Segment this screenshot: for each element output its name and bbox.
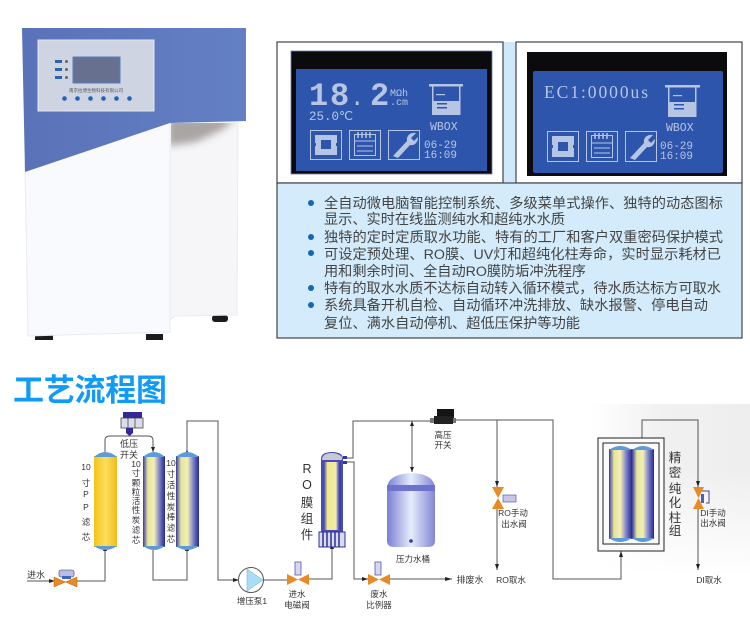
granular carbon label: 颗 (132, 478, 141, 488)
carbon rod label: 寸 (167, 469, 176, 479)
carbon rod label (166, 458, 176, 544)
blue top housing (22, 28, 246, 172)
reading: EC1:0000us (544, 82, 648, 102)
cabinet feet (35, 315, 228, 340)
notepad icon (350, 130, 380, 160)
wrench icon (626, 132, 656, 162)
panel: left LCD display: 2 (370, 78, 389, 115)
RO membrane label: R (302, 462, 312, 476)
high pressure switch label (434, 430, 452, 450)
polishing column label: 化 (669, 496, 682, 510)
carbon rod label: 滤 (167, 523, 176, 533)
inlet valve (54, 570, 77, 587)
date and time: 06-29 (424, 140, 457, 152)
high pressure switch label: 开关 (434, 440, 452, 450)
DI manual valve label (700, 508, 726, 528)
feature text: 特有的取水水质不达标自动转入循环模式，待水质达标方可取水 (324, 281, 721, 297)
RO membrane label: 膜 (301, 496, 313, 510)
granular carbon label: 芯 (132, 535, 141, 545)
RO membrane module (319, 452, 347, 547)
granular carbon label (131, 459, 141, 545)
low pressure switch label: 开关 (120, 449, 138, 460)
granular carbon label: 滤 (132, 525, 141, 535)
low pressure switch label: 低压 (120, 438, 138, 449)
arrowheads (49, 421, 700, 583)
carbon rod label: 炭 (167, 502, 176, 512)
polishing column label: 精 (669, 451, 681, 465)
PP filter label: P (83, 489, 89, 499)
PP filter tank (94, 452, 117, 550)
feature text: 复位、满水自动停机、超低压保护等功能 (324, 315, 580, 332)
feature text: 独特的定时定质取水功能、特有的工厂和客户双重密码保护模式 (324, 229, 723, 246)
concentrate ratio valve (368, 562, 390, 585)
concentrate ratio label: 比例器 (366, 600, 392, 610)
inlet label: 进水 (27, 569, 45, 580)
temperature: 25.0℃ (309, 110, 353, 124)
panel company name: 南京拉博生物科技有限公司 (69, 87, 123, 94)
RO membrane label (301, 462, 313, 542)
recess shadow (168, 118, 236, 146)
pressure tank label: 压力水桶 (396, 554, 430, 564)
inlet solenoid label: 进水 (288, 589, 306, 599)
inlet solenoid label (284, 589, 310, 610)
pipes (27, 420, 698, 581)
frame (277, 42, 503, 183)
cabinet white body (25, 120, 170, 336)
inlet solenoid label: 电磁阀 (284, 600, 310, 610)
RO membrane label: 件 (301, 528, 313, 542)
carbon rod label: 性 (167, 491, 176, 501)
screen (533, 71, 723, 173)
panel: left LCD display: 16:09 (424, 150, 457, 162)
heading: process flow diagram: 工艺流程图 (13, 365, 167, 410)
polishing column right (632, 446, 654, 542)
polishing column label (669, 451, 682, 538)
PP filter label: 滤 (82, 517, 91, 527)
wrench icon (388, 130, 420, 160)
reading: 1 (309, 78, 328, 115)
carbon rod label: 活 (167, 480, 176, 490)
WBOX label: WBOX (430, 121, 458, 134)
high pressure switch (430, 409, 456, 424)
carbon rod label: 10 (166, 458, 176, 468)
bezel (291, 51, 492, 174)
carbon rod label: 棒 (167, 512, 176, 522)
panel: right LCD display (516, 42, 742, 183)
date and time: 06-29 (660, 141, 693, 153)
panel: LCD screens area background (503, 42, 516, 184)
booster pump label: 增压泵1 (237, 596, 267, 606)
RO manual valve (492, 487, 516, 509)
high pressure switch label: 高压 (434, 430, 452, 440)
feature text: 全自动微电脑智能控制系统、多级菜单式操作、独特的动态图标 (324, 195, 723, 212)
panel: left LCD display: 8 (330, 78, 349, 115)
granular carbon label: 10 (131, 459, 141, 469)
tank icon (665, 85, 700, 117)
DI manual valve label: DI手动 (700, 508, 726, 518)
panel: right LCD display: 16:09 (660, 151, 693, 163)
RO manual valve label (498, 508, 528, 529)
panel screen (73, 57, 120, 83)
concentrate ratio label: 废水 (370, 589, 388, 599)
RO water label: RO取水 (496, 575, 526, 585)
polishing column label: 柱 (669, 510, 681, 525)
PP filter label: 寸 (82, 478, 91, 488)
notepad icon (586, 132, 618, 162)
panel indicators (55, 60, 68, 79)
granular carbon label: 活 (132, 496, 141, 506)
bezel (527, 52, 727, 176)
inlet solenoid valve (287, 562, 309, 585)
polishing column label: 纯 (669, 482, 682, 496)
screen (296, 69, 487, 171)
PP filter label: 芯 (82, 532, 91, 542)
granular carbon label: 性 (132, 505, 141, 515)
panel: left LCD display (277, 42, 503, 183)
control panel (38, 40, 154, 111)
cabinet right side (170, 122, 238, 320)
RO membrane label: O (302, 478, 312, 492)
RO manual valve label: 出水阀 (501, 519, 527, 529)
polishing column frame (598, 438, 664, 551)
RO membrane label: 组 (301, 512, 313, 526)
polishing column label: 密 (669, 465, 681, 480)
tank icon (429, 84, 463, 115)
waste water label: 排废水 (456, 574, 484, 585)
frame (516, 42, 742, 183)
DI water label: DI取水 (696, 575, 722, 585)
RO manual valve label: RO手动 (498, 508, 528, 518)
concentrate ratio label (366, 589, 392, 610)
feature text: 可设定预处理、RO膜、UV灯和超纯化柱寿命，实时显示耗材已 (324, 246, 721, 263)
carbon rod label: 芯 (167, 534, 176, 544)
PP filter label: P (83, 502, 89, 512)
booster pump (238, 568, 264, 592)
panel: left LCD display: .cm (390, 98, 408, 109)
granular carbon label: 粒 (132, 487, 141, 497)
polishing column left (609, 446, 632, 542)
bullets (308, 200, 314, 308)
PP filter label: 10 (81, 462, 91, 472)
feature text: 用和剩余时间、全自动RO膜防垢冲洗程序 (324, 263, 586, 280)
WBOX label: WBOX (666, 122, 694, 135)
granular carbon label: 炭 (132, 515, 141, 525)
carbon rod tank (176, 452, 199, 550)
feature text: 系统具备开机自检、自动循环冲洗排放、缺水报警、停电自动 (324, 297, 708, 314)
DI manual valve (693, 487, 709, 509)
process flow diagram (27, 404, 750, 610)
granular carbon tank (143, 452, 165, 550)
polishing column label: 组 (669, 524, 681, 538)
granular carbon label: 寸 (132, 468, 141, 478)
pressure water tank (387, 473, 435, 547)
low pressure switch (121, 412, 143, 436)
unit: MΩh (390, 88, 408, 100)
PP filter label (81, 462, 91, 542)
diagram background shading (590, 404, 750, 575)
product photo: water purifier cabinet (22, 28, 246, 340)
panel buttons (62, 96, 132, 101)
panel: left LCD display: . (350, 86, 364, 113)
panel background (277, 183, 742, 338)
chip icon (310, 130, 342, 160)
feature text: 显示、实时在线监测纯水和超纯水水质 (324, 212, 565, 228)
DI manual valve label: 出水阀 (700, 518, 726, 528)
chip icon (548, 132, 578, 162)
low pressure switch label (120, 438, 138, 460)
panel: feature list (277, 183, 742, 338)
feature text (324, 195, 723, 332)
